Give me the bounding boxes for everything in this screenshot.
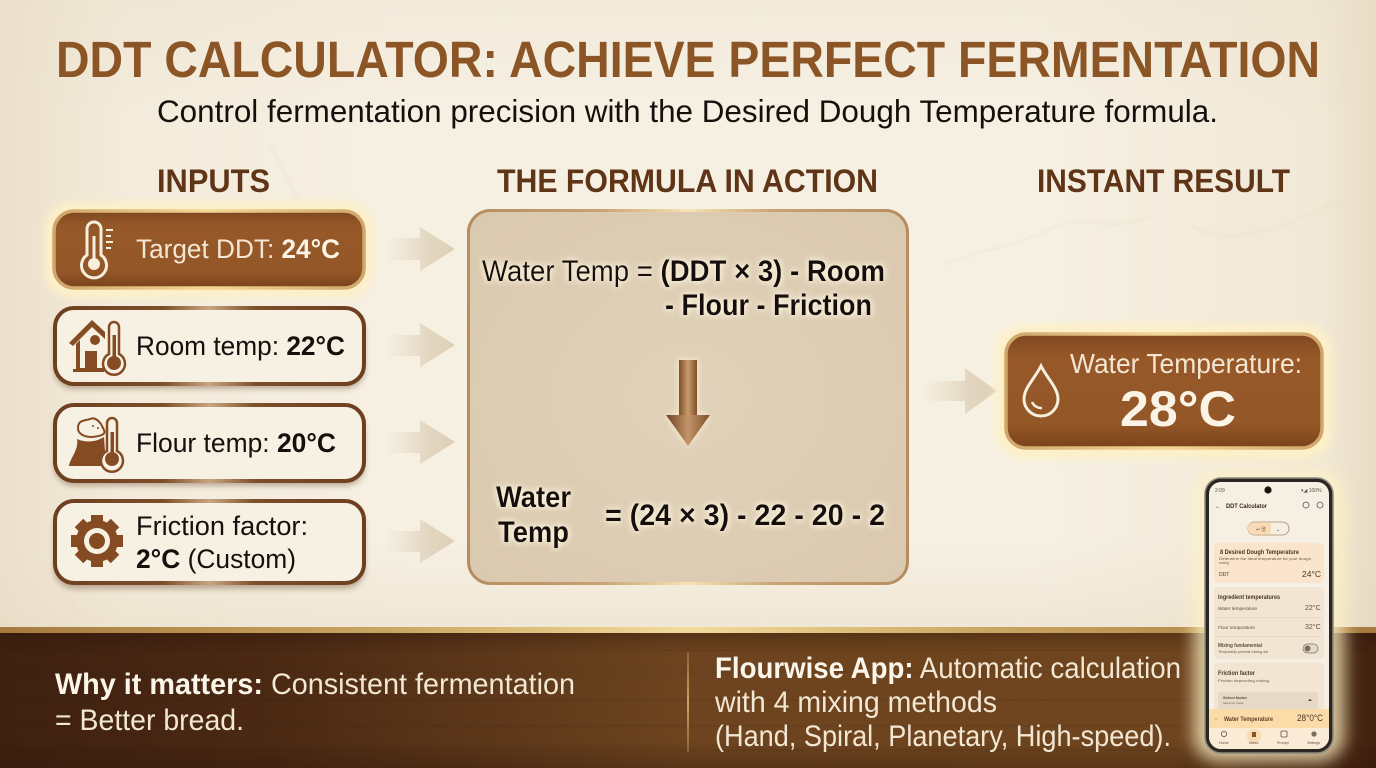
- arrow: friction to formula: [388, 519, 455, 563]
- card: ingredient temperatures: Ingredient temperatures: [1218, 595, 1281, 601]
- label: water temperature: Water Temperature:: [1070, 348, 1302, 379]
- card: ingredient temperatures: 22°C: [1305, 604, 1321, 612]
- bottom navigation: Settings: [1307, 741, 1320, 745]
- arrow: flour to formula: [388, 420, 455, 464]
- text: Flourwise app: [714, 652, 1181, 753]
- toggle: [1248, 522, 1289, 535]
- icon: water drop: [1024, 366, 1058, 416]
- card: friction factor: [54, 501, 365, 589]
- card: room temp: [54, 308, 365, 389]
- status bar: 2:09: [1215, 488, 1225, 494]
- card: ingredient temperatures: 32°C: [1305, 623, 1321, 631]
- card: friction factor settings: Select factor: [1223, 695, 1247, 700]
- bottom navigation: Mixes: [1249, 741, 1259, 745]
- result strip: water temperature: ▫: [1215, 717, 1217, 723]
- calculation: = (24 × 3) - 22 - 20 - 2: [605, 499, 885, 532]
- arrow: target to formula: [388, 227, 455, 271]
- icon: flour sack and thermometer: [69, 418, 123, 472]
- card: ingredient temperatures: Flour temperature: [1218, 625, 1256, 630]
- card: friction factor settings: hand mix mode: [1223, 701, 1244, 705]
- bottom bar: [0, 627, 1376, 768]
- card: friction factor settings: Friction depending mixing: [1218, 679, 1269, 683]
- heading: the formula in action: THE FORMULA IN ACTION: [497, 163, 878, 199]
- label: room temp: Room temp: 22°C: [136, 331, 345, 361]
- text: why it matters: [55, 668, 575, 737]
- panel: inputs: [44, 202, 374, 589]
- text: Flourwise app: with 4 mixing methods: [714, 686, 997, 719]
- formula line 2: - Flour - Friction: [665, 289, 872, 322]
- card: desired dough temperature: DDT: [1219, 572, 1229, 578]
- card: friction factor settings: [1214, 663, 1324, 713]
- value: 28°C: 28°C: [1120, 381, 1236, 437]
- status bar: ▾◢ 100%: [1301, 488, 1322, 494]
- app header: [1215, 502, 1323, 510]
- app header: DDT Calculator: [1226, 503, 1267, 510]
- text: Flourwise app: Flourwise App: Automatic calculation: [715, 652, 1181, 685]
- value: friction factor: 2°C (Custom): [136, 544, 296, 574]
- card: ingredient temperatures: [1214, 587, 1324, 659]
- icon: house and thermometer: [69, 320, 125, 375]
- heading: inputs: INPUTS: [157, 163, 270, 199]
- label: target DDT: Target DDT: 24°C: [136, 234, 340, 264]
- card: flour temp: [54, 405, 365, 486]
- label: water temp: Water: [496, 481, 571, 514]
- card: desired dough temperature: Determine the ideal temperature for your dough: [1219, 557, 1311, 561]
- panel: result: [995, 324, 1333, 459]
- panel: formula: [468, 210, 908, 584]
- card: target DDT: [44, 202, 374, 298]
- text: Flourwise app: (Hand, Spiral, Planetary, High-speed).: [715, 720, 1171, 753]
- arrow: down: [666, 360, 710, 446]
- text: why it matters: Why it matters: Consistent fermentation: [55, 668, 575, 701]
- card: desired dough temperature: mixing: [1219, 561, 1229, 565]
- card: ingredient temperatures: Mixing fundamental: [1218, 643, 1263, 649]
- card: friction factor settings: Friction factor: [1218, 671, 1256, 677]
- phone mockup: [1193, 470, 1345, 762]
- card: ingredient temperatures: Temporarily preheat mixing aid: [1218, 650, 1268, 654]
- label: water temp: [496, 481, 571, 549]
- result strip: water temperature: Water Temperature: [1224, 717, 1274, 723]
- text: why it matters: = Better bread.: [55, 704, 244, 737]
- label: flour temp: Flour temp: 20°C: [136, 428, 336, 458]
- label: friction factor: Friction factor:: [136, 511, 308, 541]
- app header: ←: [1215, 504, 1221, 510]
- bottom navigation: Home: [1219, 741, 1229, 745]
- arrow: formula to result: [925, 368, 997, 414]
- toggle: ⌄: [1276, 527, 1280, 533]
- status bar: [1215, 486, 1322, 494]
- icon: gear: [71, 515, 123, 567]
- result strip: water temperature: 28°0°C: [1297, 713, 1323, 723]
- arrow: room to formula: [388, 323, 455, 367]
- heading: instant result: INSTANT RESULT: [1037, 163, 1290, 199]
- icon: thermometer: [82, 222, 113, 278]
- subtitle: Control fermentation precision with the Desired Dough Temperature formula.: [157, 93, 1218, 129]
- toggle: ↩ 🗎: [1256, 527, 1266, 533]
- bottom navigation: [1209, 728, 1329, 749]
- card: desired dough temperature: 24°C: [1302, 569, 1321, 579]
- card: ingredient temperatures: Water temperature: [1218, 606, 1258, 611]
- formula line 1: Water Temp = (DDT × 3) - Room: [482, 255, 885, 288]
- card: desired dough temperature: [1214, 543, 1324, 583]
- bottom navigation: Prompt: [1277, 741, 1289, 745]
- card: desired dough temperature: 8 Desired Dough Temperature: [1220, 549, 1299, 556]
- label: water temp: Temp: [498, 516, 569, 549]
- result strip: water temperature: [1209, 709, 1329, 728]
